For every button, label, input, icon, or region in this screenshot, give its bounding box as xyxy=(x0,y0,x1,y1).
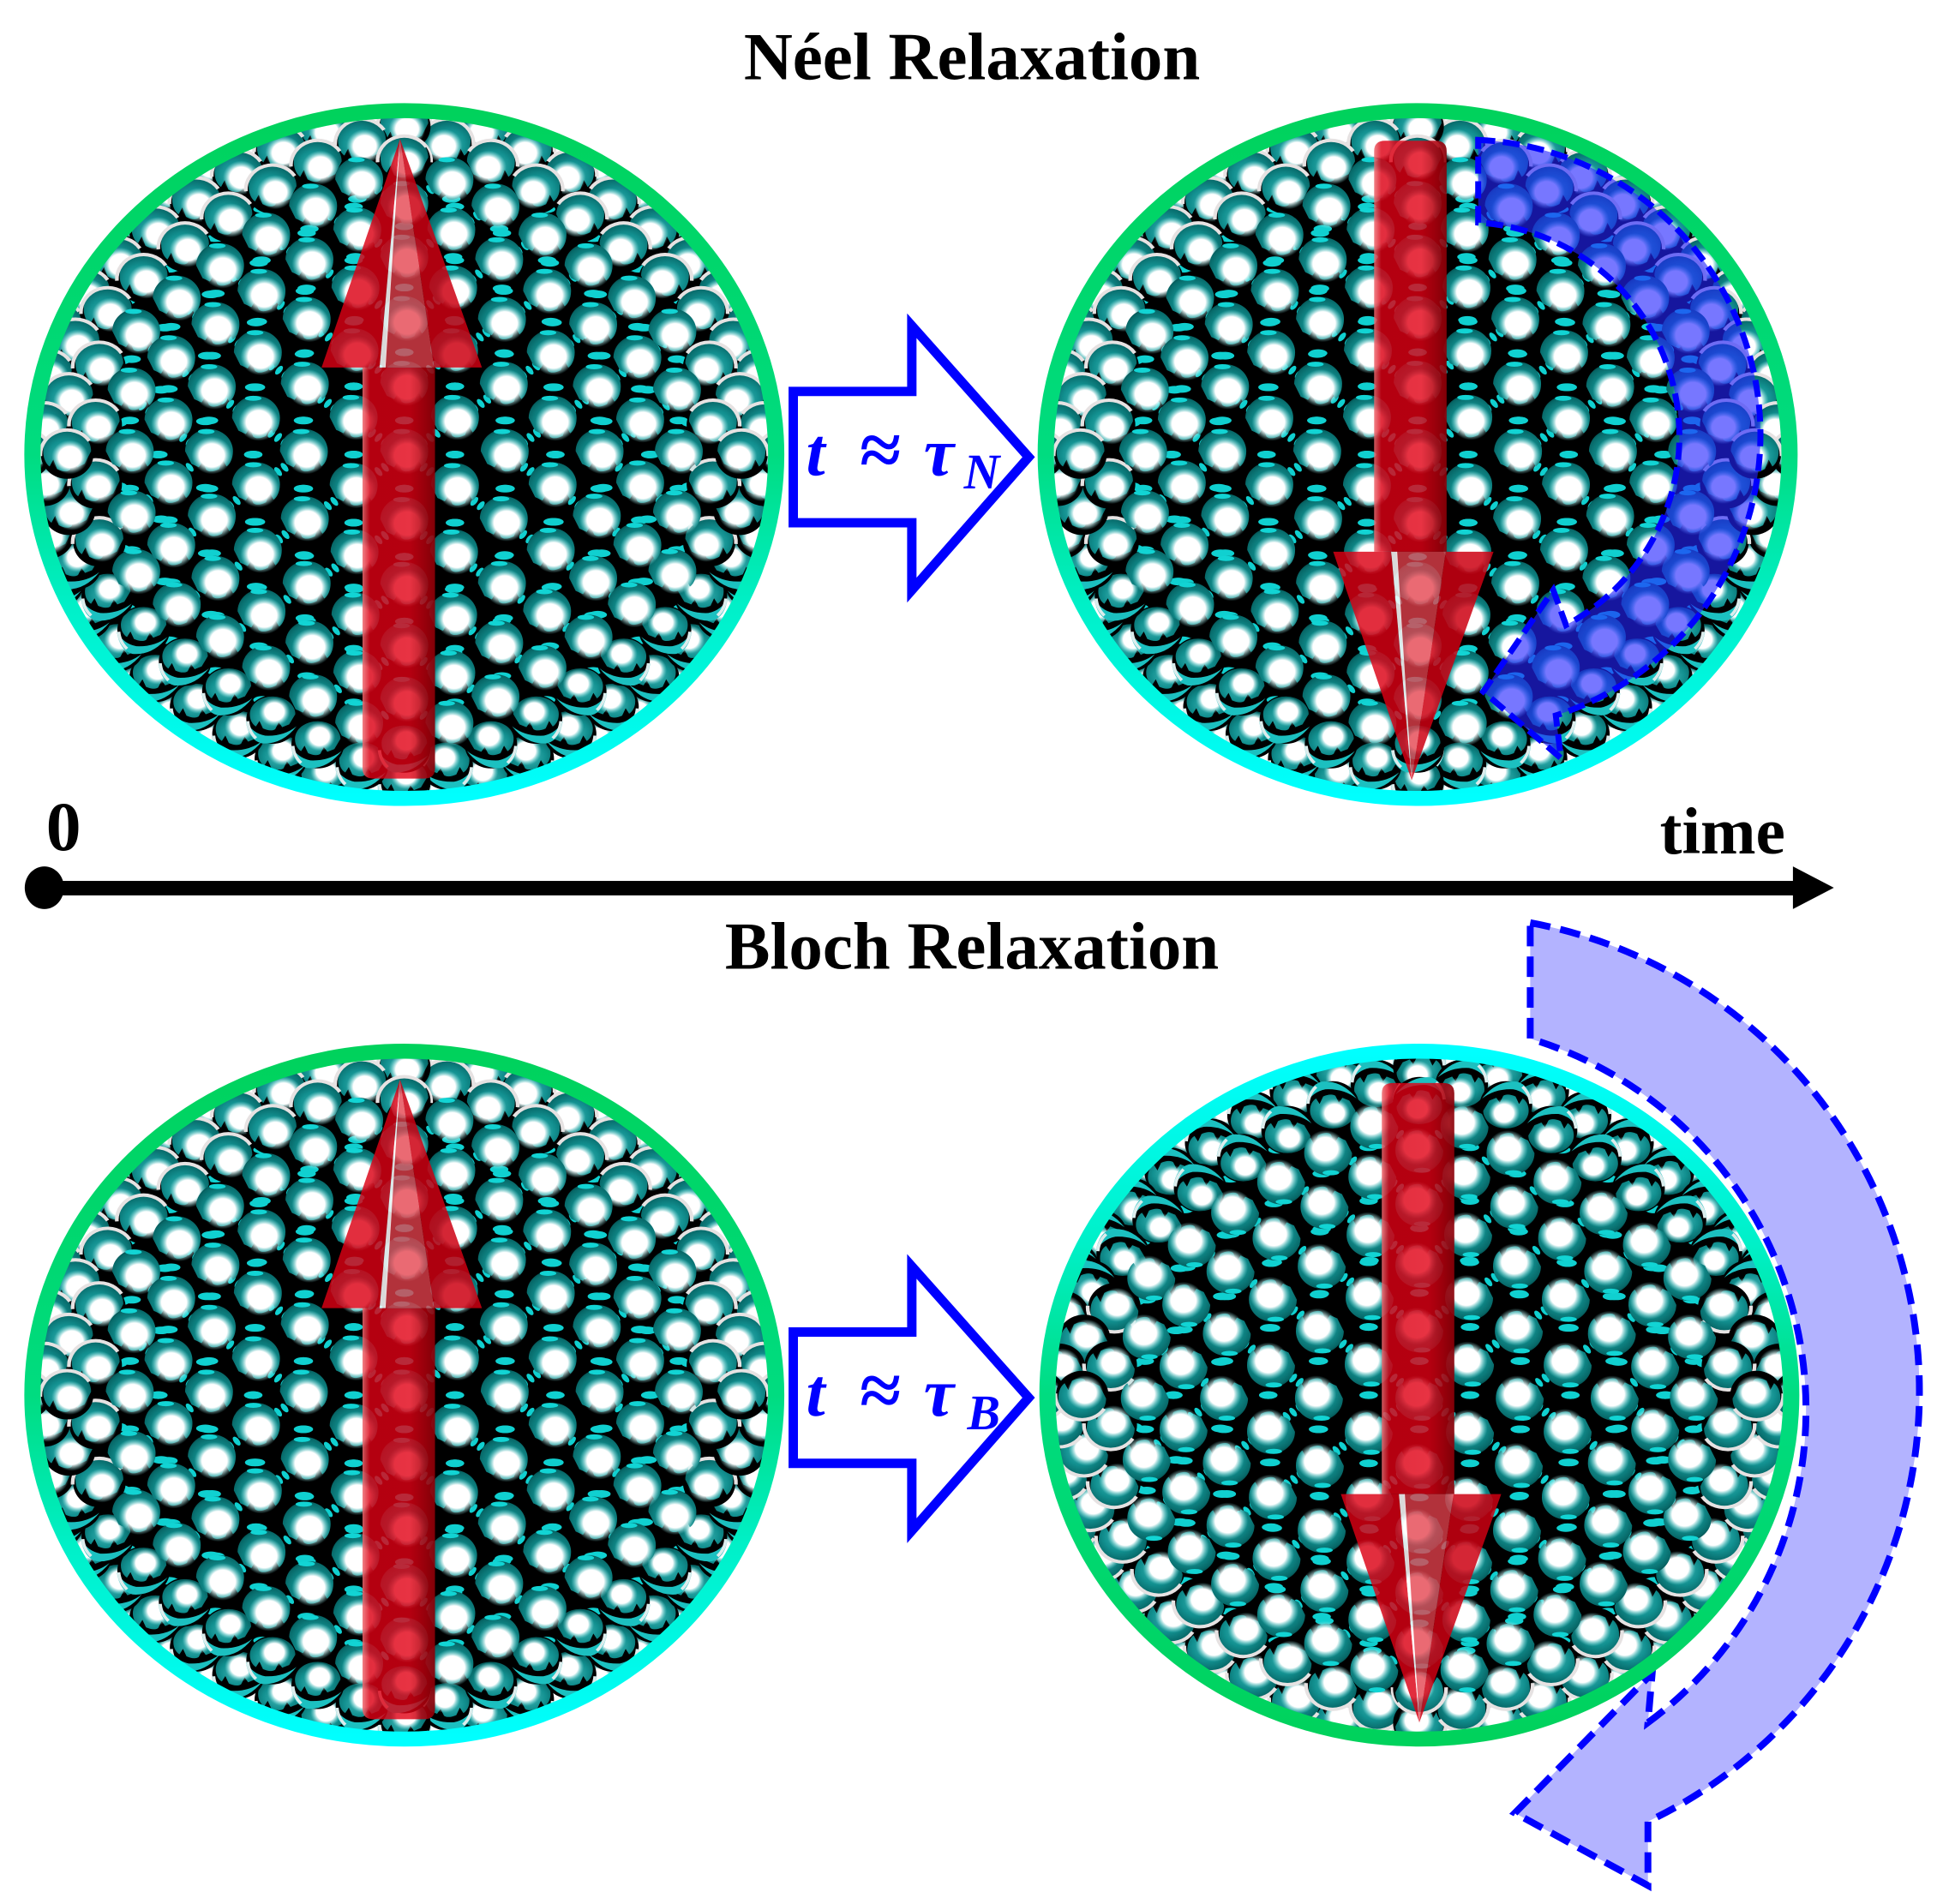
block arrow: t approx tau B: B xyxy=(967,1386,1000,1440)
curved arrow: internal moment rotation xyxy=(1478,140,1760,758)
arrow: magnetic moment down xyxy=(1333,141,1494,781)
arrow: magnetic moment up xyxy=(321,139,482,779)
curved arrow: whole particle rotation xyxy=(1514,923,1919,1885)
block arrow: t approx tau B: τ xyxy=(924,1356,957,1431)
arrow: magnetic moment down xyxy=(1340,1083,1502,1722)
block arrow: t approx tau B: t xyxy=(806,1356,827,1431)
sphere: nanoparticle with atoms xyxy=(1000,66,1835,841)
arrow: magnetic moment up xyxy=(321,1080,482,1719)
sphere: nanoparticle with atoms xyxy=(0,66,822,841)
axis label: time: time xyxy=(1660,794,1785,868)
timeline axis xyxy=(25,866,1834,909)
block arrow: t approx tau B: ≈ xyxy=(860,1349,901,1432)
panel: Néel initial nanoparticle xyxy=(0,66,822,841)
sphere: nanoparticle with atoms xyxy=(0,1007,822,1782)
panel: Bloch initial nanoparticle xyxy=(0,1007,822,1782)
block arrow: t approx tau N: τ xyxy=(924,415,957,490)
block arrow: t approx tau N: t xyxy=(806,415,827,490)
panel: Bloch relaxed nanoparticle xyxy=(1002,923,1919,1885)
heading: Bloch Relaxation: Bloch Relaxation xyxy=(725,910,1219,985)
sphere: rotated nanoparticle with atoms xyxy=(1002,1008,1837,1784)
block arrow: t approx tau N: N xyxy=(963,446,1002,500)
block arrow: t approx tau B xyxy=(794,1266,1028,1530)
block arrow: t approx tau N: ≈ xyxy=(860,408,901,491)
block arrow: t approx tau N xyxy=(794,326,1028,590)
axis label: 0: 0 xyxy=(46,787,81,865)
panel: Néel relaxed nanoparticle xyxy=(1000,66,1835,841)
title: Néel Relaxation: Néel Relaxation xyxy=(744,21,1200,95)
